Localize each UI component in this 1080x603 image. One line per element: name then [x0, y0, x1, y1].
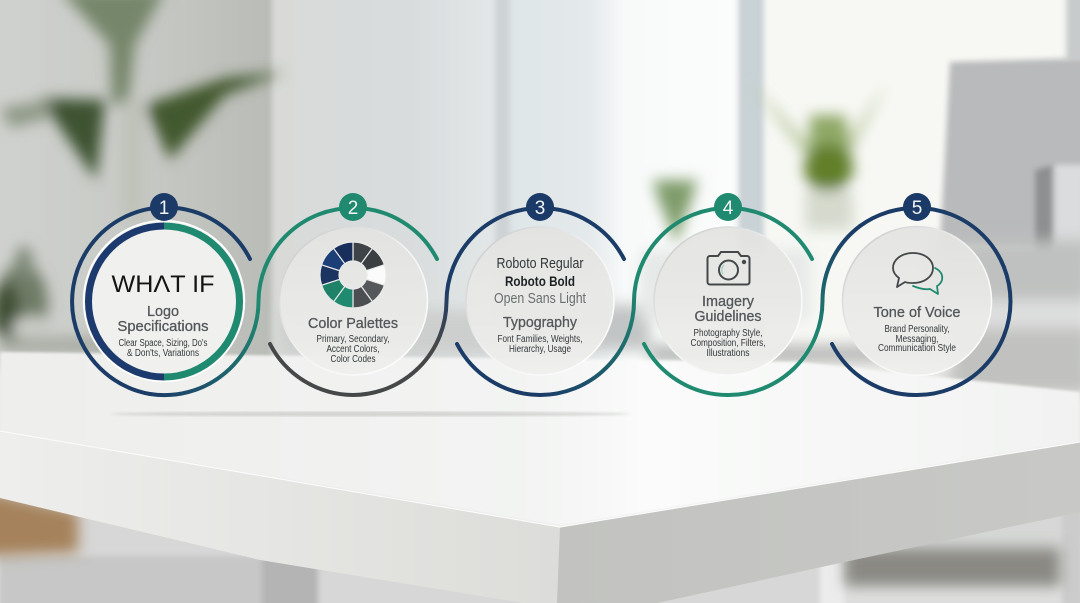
- ring 1 to ring 2: [72, 207, 437, 395]
- glass disc: [654, 227, 802, 375]
- panel: imagery guidelines: [654, 193, 802, 375]
- number badge 3: [526, 193, 554, 221]
- font samples: Roboto Bold: [505, 273, 575, 289]
- description: Photography Style,: [694, 328, 762, 339]
- description: [316, 334, 390, 365]
- glass disc: [842, 226, 992, 376]
- number badge 4: 4: [723, 198, 734, 219]
- back shelf band: [280, 240, 1080, 393]
- table: [0, 352, 1080, 603]
- logo wordmark: WHΛT IF: [112, 271, 214, 298]
- glass disc: [84, 220, 244, 382]
- heading: Specifications: [118, 318, 208, 335]
- description: Brand Personality,: [884, 324, 950, 335]
- description: Communication Style: [878, 343, 956, 354]
- number badge 5: 5: [912, 198, 922, 219]
- description: Illustrations: [706, 348, 750, 359]
- description: & Don'ts, Variations: [127, 348, 199, 359]
- description: Font Families, Weights,: [498, 334, 582, 345]
- ring 2 to ring 3: [270, 208, 624, 395]
- heading: Guidelines: [694, 308, 762, 325]
- font samples: Open Sans Light: [494, 291, 586, 307]
- description: [690, 328, 766, 359]
- number badge 2: [339, 193, 367, 221]
- heading: [118, 303, 208, 335]
- glass disc: [466, 227, 614, 375]
- description: [878, 324, 956, 354]
- font samples: Roboto Regular: [496, 256, 584, 272]
- description: Color Codes: [330, 354, 376, 365]
- connecting rings: [72, 207, 1011, 395]
- description: Primary, Secondary,: [316, 334, 390, 345]
- icon: color wheel: [320, 242, 386, 308]
- left plant: [0, 0, 285, 220]
- monitor: [940, 58, 1080, 265]
- soft shadow on table: [110, 412, 630, 416]
- number badge 2: 2: [348, 198, 358, 219]
- heading: Color Palettes: [308, 315, 398, 332]
- panel: logo specifications: [84, 193, 244, 382]
- panel: color palettes: [280, 193, 428, 375]
- description: Composition, Filters,: [690, 338, 766, 349]
- description: Clear Space, Sizing, Do's: [118, 338, 208, 349]
- description: [118, 338, 208, 359]
- right plants: [652, 82, 888, 245]
- lower left foliage: [0, 246, 120, 352]
- ring 3 to ring 4: [457, 208, 812, 395]
- ring 4 to ring 5: [644, 208, 1010, 395]
- icon: camera: [708, 252, 750, 284]
- two-tone inner ring: [88, 226, 240, 377]
- description: Messaging,: [896, 334, 938, 345]
- terracotta pot and shadow under table: [0, 490, 1060, 586]
- number badge 1: 1: [159, 198, 169, 219]
- number badge 3: 3: [535, 198, 545, 219]
- panel: tone of voice: [842, 193, 992, 376]
- number badge 5: [903, 193, 931, 221]
- description: Accent Colors,: [326, 344, 380, 355]
- number badge 4: [714, 193, 742, 221]
- description: [498, 334, 582, 355]
- heading: [694, 293, 762, 325]
- heading: Typography: [503, 314, 577, 331]
- floor: [0, 480, 1080, 603]
- panel: typography: [466, 193, 614, 375]
- number badge 1: [150, 193, 178, 221]
- heading: Logo: [147, 303, 179, 320]
- icon: speech bubbles: [893, 253, 942, 294]
- heading: Imagery: [702, 293, 754, 310]
- font samples: [494, 256, 586, 307]
- description: Hierarchy, Usage: [509, 344, 571, 355]
- heading: Tone of Voice: [874, 304, 960, 321]
- glass disc: [280, 227, 428, 375]
